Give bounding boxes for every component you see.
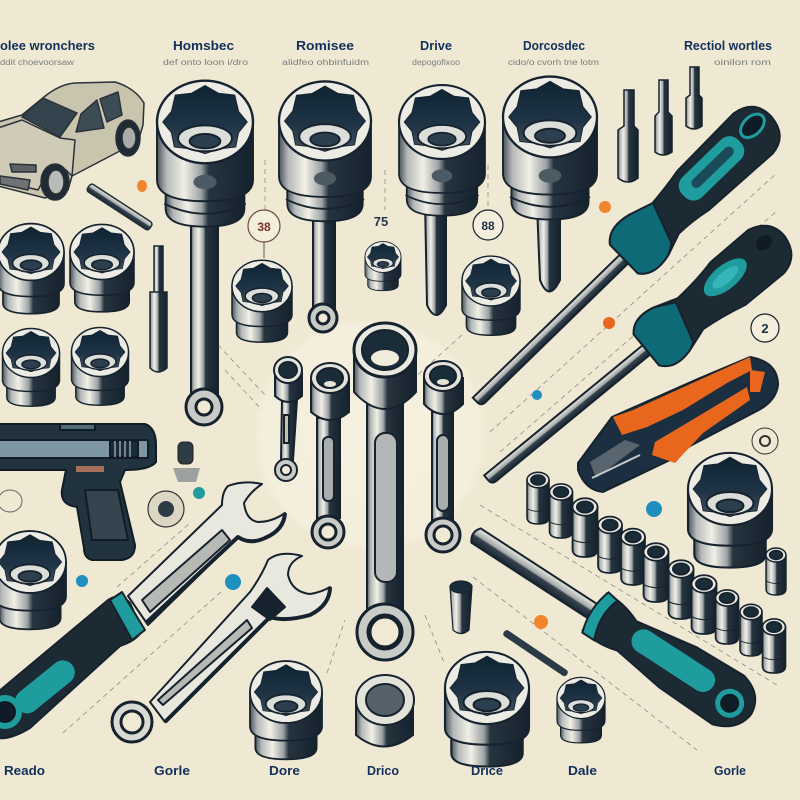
bottom labels: Gorle — [714, 763, 746, 778]
top labels: oinilon rom — [714, 58, 771, 67]
bottom labels — [4, 763, 746, 778]
long socket wrench 1 — [157, 81, 253, 425]
small centre-left marks — [0, 442, 200, 527]
bottom labels: Reado — [4, 763, 45, 778]
top labels: alidfeo ohbinfuidm — [282, 58, 369, 67]
adjustable wrench — [112, 554, 330, 742]
badge: 38 — [248, 210, 280, 258]
screwdriver 2 — [469, 213, 800, 503]
screwdriver 1 — [456, 95, 792, 423]
sockets bottom row — [250, 652, 605, 767]
icon: target washer — [752, 428, 778, 454]
centre wrench right — [424, 361, 463, 552]
top labels: Rectiol wortles — [684, 38, 772, 53]
icon: extension bit — [150, 246, 167, 372]
bottom labels: Dore — [269, 763, 300, 778]
bottom labels: Drico — [367, 763, 399, 778]
top labels: cido/o cvorh tne lotm — [508, 58, 599, 67]
top labels: depogofixoo — [412, 58, 461, 67]
top labels — [0, 38, 772, 67]
centre wrench large — [354, 323, 416, 660]
badge: 2: 2 — [761, 321, 769, 336]
top labels: Romisee — [296, 38, 354, 53]
badge: 75: 75 — [374, 214, 388, 229]
short sockets, left group — [0, 224, 134, 406]
small bit bottom centre — [450, 581, 472, 634]
icon: loose pin — [86, 183, 153, 231]
pliers — [578, 357, 778, 492]
top labels: ddit choevoorsaw — [0, 58, 74, 67]
small socket row — [527, 472, 786, 673]
top labels: Dorcosdec — [523, 38, 585, 53]
screwdriver 3 — [457, 510, 767, 739]
long socket wrench 4 — [503, 77, 597, 292]
coloured dots — [76, 180, 662, 629]
badge: 88: 88 — [481, 219, 495, 233]
socket, lower left — [0, 531, 66, 629]
centre wrench small — [274, 357, 302, 481]
icon: car — [0, 82, 144, 200]
dashed leader lines — [63, 160, 778, 750]
short sockets, middle — [232, 242, 520, 342]
badge: 38: 38 — [257, 220, 271, 234]
bottom labels: Dale — [568, 763, 597, 778]
badge: 2 — [751, 314, 779, 342]
top labels: olee wronchers — [0, 38, 95, 53]
screwdriver wrench — [0, 482, 285, 738]
centre glow — [248, 313, 492, 557]
top labels: Drive — [420, 38, 452, 53]
bottom labels: Gorle — [154, 763, 190, 778]
long socket wrench 2 — [279, 81, 371, 332]
top labels: def onto loon i/dro — [163, 58, 249, 67]
icon: impact gun — [0, 424, 156, 560]
bottom labels: Drice — [471, 763, 503, 778]
large socket right — [688, 453, 772, 568]
top labels: Homsbec — [173, 38, 234, 53]
badge: 88 — [473, 210, 503, 240]
centre wrench left — [311, 363, 349, 548]
small pin — [502, 629, 569, 677]
long socket wrench 3 — [399, 85, 485, 315]
small bits top right — [618, 67, 702, 182]
